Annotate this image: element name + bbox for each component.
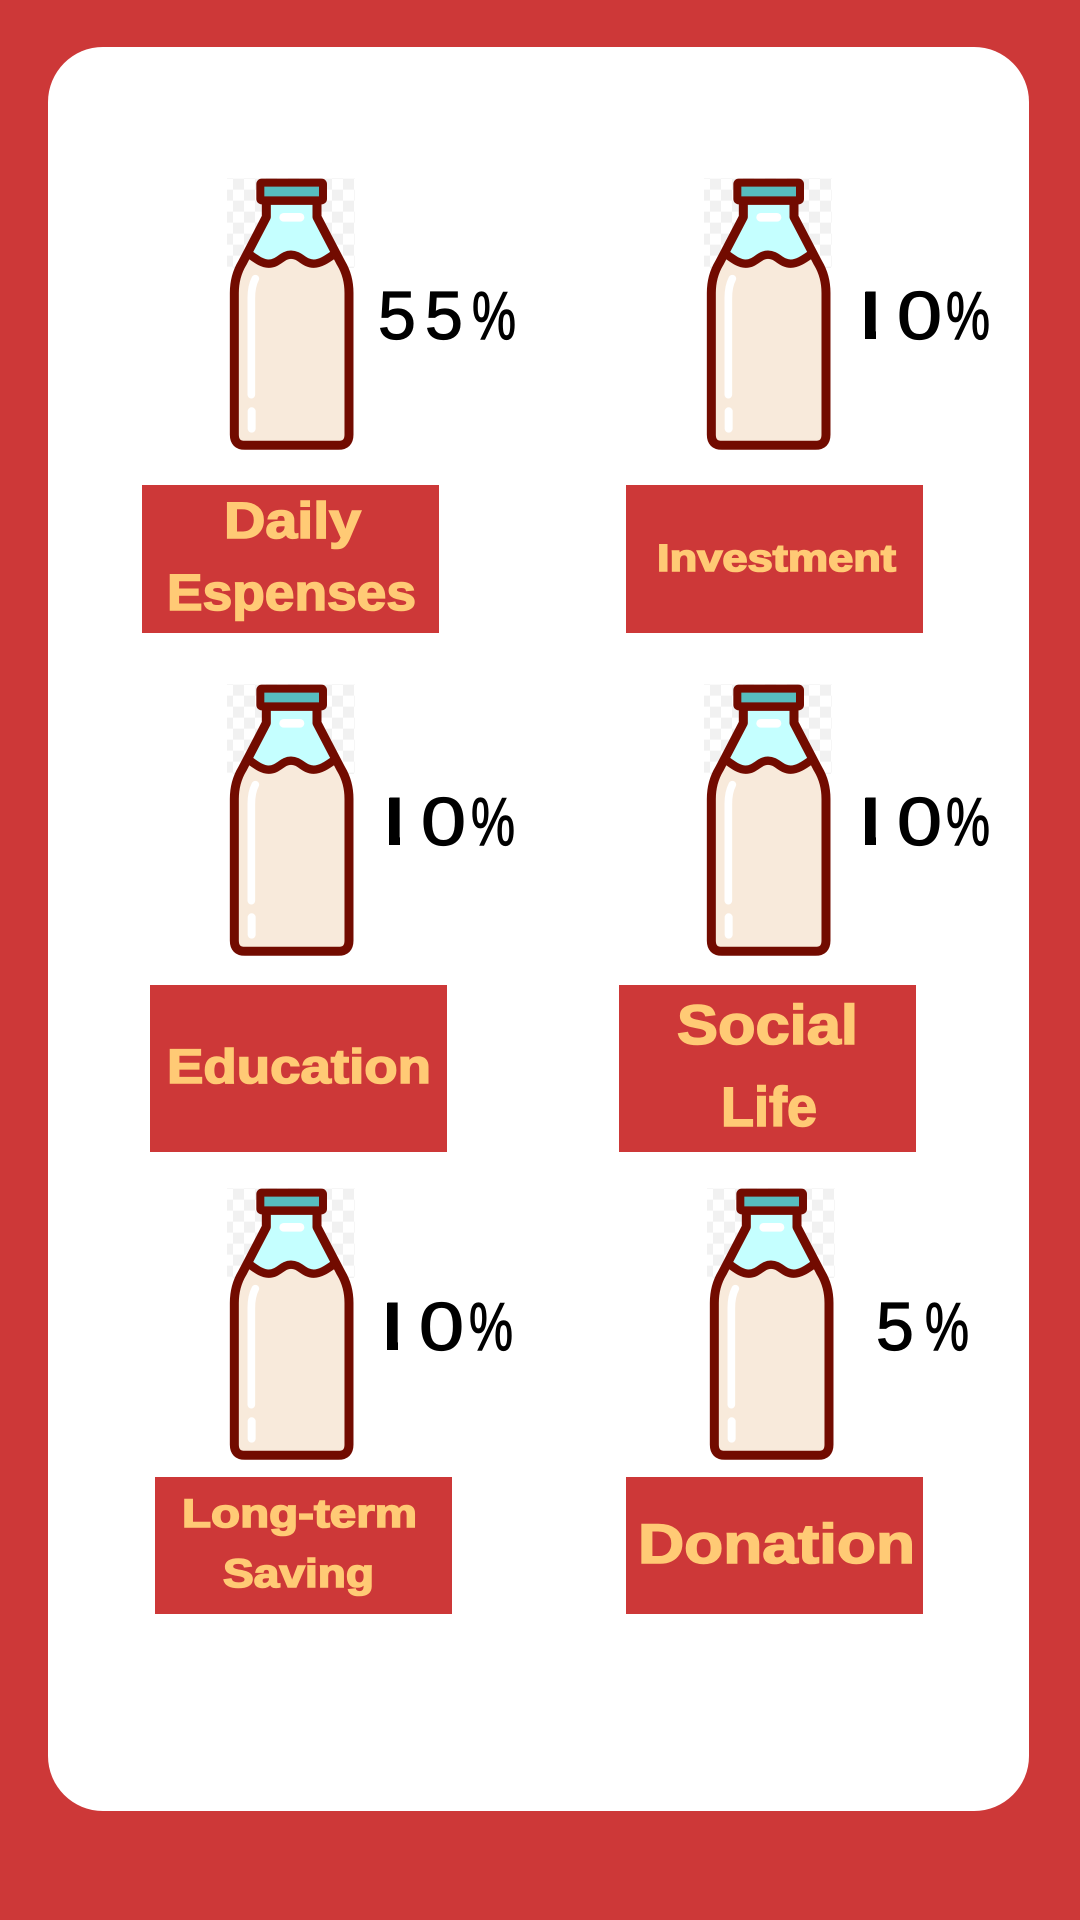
label: daily espenses xyxy=(142,485,439,633)
label: long-term saving: Saving xyxy=(223,1552,374,1596)
label: donation xyxy=(626,1477,923,1614)
percentage: 10% xyxy=(389,796,514,846)
percentage: 55%: 5 xyxy=(378,278,416,354)
percentage: 10%: % xyxy=(946,784,990,860)
percentage: 10% xyxy=(865,290,989,340)
item: education xyxy=(150,684,515,1152)
percentage: 55%: 5 xyxy=(425,278,463,354)
item: investment xyxy=(626,178,990,633)
percentage: 5%: 5 xyxy=(876,1289,914,1365)
label: investment: Investment xyxy=(657,538,896,580)
percentage: 10% xyxy=(387,1302,512,1352)
percentage: 10%: 1 xyxy=(372,1289,410,1365)
percentage: 10%: 1 xyxy=(374,784,412,860)
label: long-term saving: Long-term xyxy=(182,1492,417,1536)
label: education: Education xyxy=(167,1041,431,1094)
percentage: 5%: % xyxy=(925,1289,969,1365)
percentage: 10% xyxy=(865,796,989,846)
label: education xyxy=(150,985,447,1152)
icon: milk bottle xyxy=(227,684,355,961)
label: social life: Social xyxy=(677,993,858,1056)
label: social life: Life xyxy=(721,1075,817,1138)
percentage: 10%: 0 xyxy=(421,784,466,860)
label: social life xyxy=(619,985,916,1152)
label: investment xyxy=(626,485,923,633)
item: long-term saving xyxy=(155,1188,513,1614)
percentage: 10%: 1 xyxy=(850,784,888,860)
percentage: 55%: % xyxy=(472,278,516,354)
item: donation xyxy=(626,1188,969,1614)
percentage: 10%: 0 xyxy=(897,278,942,354)
icon: milk bottle xyxy=(704,178,832,455)
percentage: 10%: 0 xyxy=(897,784,942,860)
item: daily expenses xyxy=(142,178,516,633)
icon: milk bottle xyxy=(227,1188,355,1465)
icon: milk bottle xyxy=(704,684,832,961)
percentage: 10%: % xyxy=(469,1289,513,1365)
percentage: 10%: 0 xyxy=(419,1289,464,1365)
icon: milk bottle xyxy=(227,178,355,455)
percentage: 10%: % xyxy=(471,784,515,860)
label: daily espenses: Daily xyxy=(224,492,362,549)
label: daily espenses: Espenses xyxy=(167,564,416,621)
item: social life xyxy=(619,684,990,1152)
label: long-term saving xyxy=(155,1477,452,1614)
icon: milk bottle xyxy=(707,1188,835,1465)
percentage: 10%: % xyxy=(946,278,990,354)
label: donation: Donation xyxy=(638,1512,915,1575)
percentage: 10%: 1 xyxy=(850,278,888,354)
